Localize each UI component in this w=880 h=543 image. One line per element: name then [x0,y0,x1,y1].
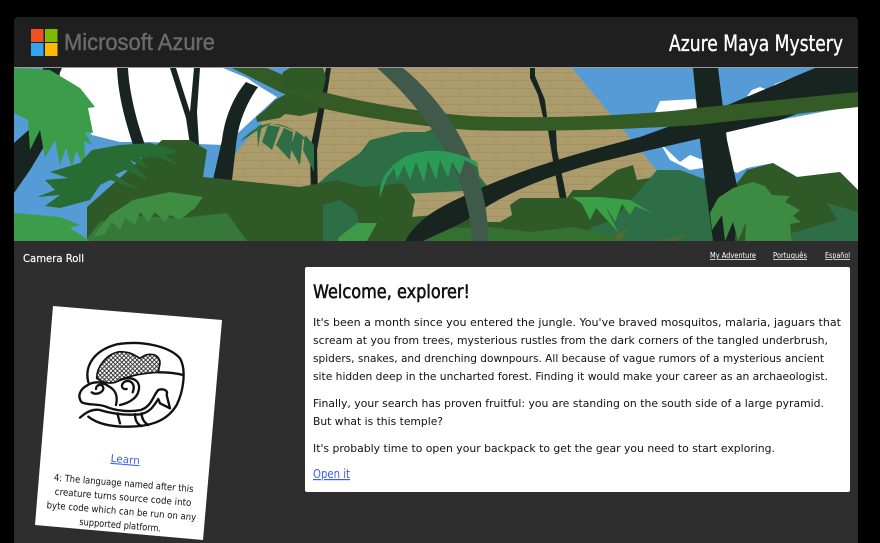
bright frond right of centre [572,197,652,232]
story text: It's probably time to open your backpack to get the gear you need to start exploring. [313,442,775,455]
panel: welcome story card [305,267,850,492]
link: Português: Português [773,251,807,260]
heading: Welcome, explorer! [313,281,470,303]
foreground dark vine [405,68,858,241]
link: Learn: Learn [110,453,140,467]
olive leaves at the bottom edge [605,227,690,241]
bright leaf bottom centre [338,223,377,241]
sloping green vine [232,68,858,131]
light frond lower centre-left [93,192,203,237]
right hill [735,163,858,241]
teal mound [318,129,480,194]
content panel background [14,241,858,543]
clump near vine top [256,68,326,122]
clue text [45,472,199,537]
medium green foliage [85,213,247,241]
pyramid [232,68,657,222]
bottom-left frond [14,213,90,241]
story text: site hidden deep in the uncharted forest. Finding it would make your career as an archaeologist. [313,370,828,383]
clouds [60,68,858,190]
story text: But what is this temple? [313,415,443,428]
frond cluster left [37,143,180,208]
icon: Microsoft logo [31,29,58,56]
clue text: 4: The language named after this [53,473,194,495]
clue text: creature turns source code into [54,487,192,509]
brand name: Microsoft Azure [64,29,215,55]
story text: scream at you from trees, mysterious rustles from the dark corners of the tangled underbrush, [313,334,828,347]
story text: spiders, snakes, and drenching downpours. All because of vague rumors of a mysterious ancient [313,352,825,365]
panel: camera roll photo card [35,306,222,540]
bright palm frond centre [380,151,477,197]
icon: Maya serpent glyph [79,343,184,427]
link: Español: Español [825,251,850,260]
story text [313,316,842,455]
header bar [14,17,858,68]
dark green undergrowth [87,140,660,241]
clue text: byte code which can be run on any [46,500,197,523]
dark leaf fronds upper centre-left [240,123,315,172]
jungle background vines [14,68,567,198]
jungle banner illustration [14,68,858,241]
navigation links [710,251,850,260]
palm bush right [710,182,801,241]
link: My Adventure: My Adventure [710,251,756,260]
teal mound right [589,170,713,241]
grey hanging vine [377,68,488,241]
story text: Finally, your search has proven fruitful: you are standing on the south side of a large pyramid. [313,397,824,410]
story text: It's been a month since you entered the jungle. You've braved mosquitos, malaria, jaguars that [313,316,842,329]
palm leaf top left [14,68,95,172]
tree trunk right [693,68,738,241]
link: Open it: Open it [313,467,350,481]
section label: Camera Roll: Camera Roll [23,252,84,265]
clue text: supported platform. [79,517,162,535]
